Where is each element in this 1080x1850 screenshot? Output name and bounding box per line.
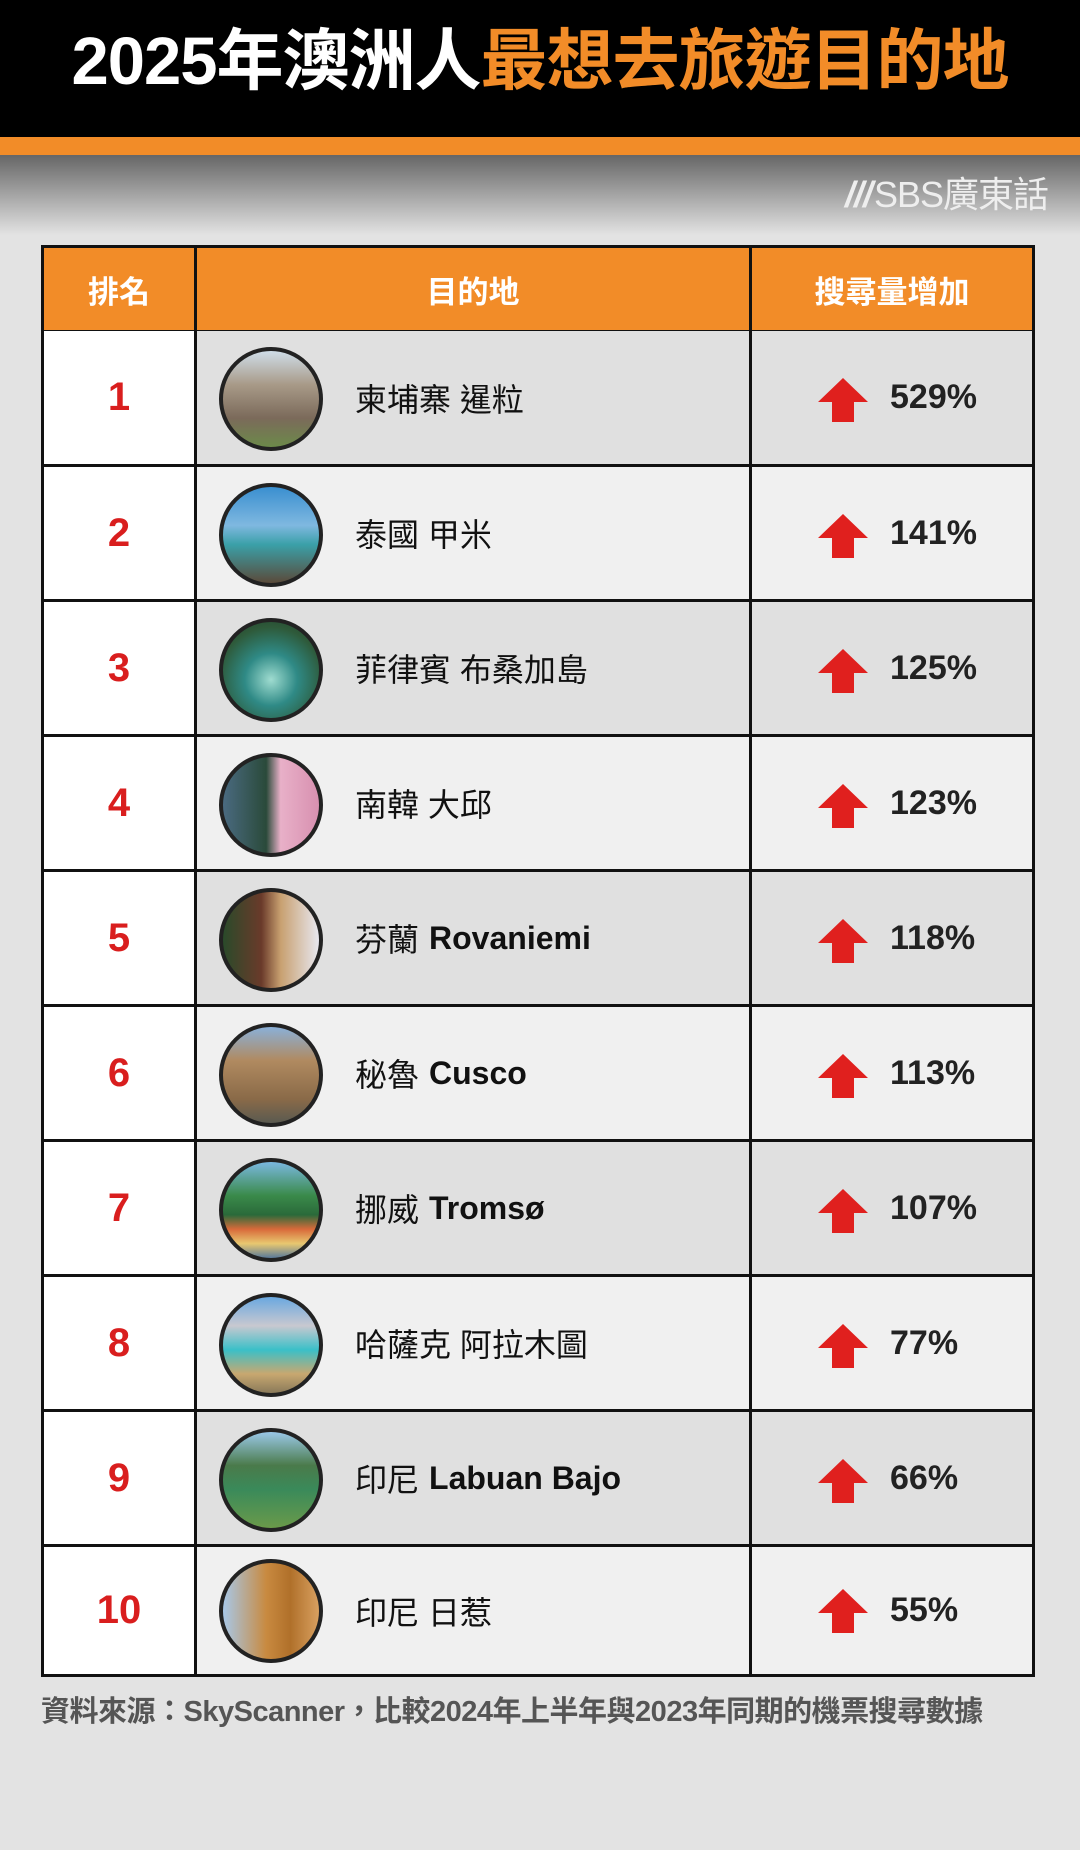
row 8: 哈薩克 阿拉木圖: [355, 1327, 588, 1363]
row 9: [44, 1412, 1032, 1544]
row 7: [44, 1142, 1032, 1274]
row 7: 107%: [890, 1188, 977, 1226]
row 3: 125%: [890, 648, 977, 686]
orange stripe: [0, 137, 1080, 155]
header bar: [0, 0, 1080, 137]
logo: SBS 廣東話: ///SBS廣東話: [845, 174, 1048, 215]
row 5: 118%: [890, 918, 975, 956]
row 4: [44, 737, 1032, 869]
row 7: Tromsø: [429, 1190, 545, 1226]
row 2: 2: [108, 510, 130, 554]
row 7: 挪威: [355, 1192, 419, 1228]
table header: [44, 248, 1032, 330]
table header: 排名: [88, 274, 150, 310]
row 1: 529%: [890, 378, 977, 416]
gray gradient band: [0, 155, 1080, 235]
row 10: 印尼 日惹: [355, 1594, 492, 1630]
title: 2025年澳洲人最想去旅遊目的地: [71, 24, 1009, 99]
table header: 搜尋量增加: [814, 274, 970, 310]
row 9: 9: [108, 1456, 130, 1500]
table header: 目的地: [426, 274, 520, 310]
row 1: 1: [108, 375, 130, 419]
table: [41, 245, 1035, 1677]
row 8: 8: [108, 1320, 130, 1364]
row 4: 4: [108, 780, 130, 824]
row 6: 6: [108, 1050, 130, 1094]
row 2: 泰國 甲米: [355, 517, 492, 553]
row 10: 55%: [890, 1591, 958, 1629]
row 3: [44, 602, 1032, 734]
row 1: [44, 331, 1032, 464]
row 5: 5: [108, 916, 130, 960]
row 5: 芬蘭: [355, 922, 419, 958]
row 2: 141%: [890, 514, 977, 552]
row 5: Rovaniemi: [429, 920, 591, 956]
row 6: [44, 1007, 1032, 1139]
footnote: 資料來源：SkyScanner，比較2024年上半年與2023年同期的機票搜尋數據: [41, 1696, 983, 1728]
row 3: 3: [108, 646, 130, 690]
row 10: [44, 1547, 1032, 1674]
row 4: 南韓 大邱: [355, 787, 492, 823]
row 8: 77%: [890, 1324, 958, 1362]
row 5: [44, 872, 1032, 1004]
row 10: 10: [97, 1588, 141, 1632]
row 3: 菲律賓 布桑加島: [355, 652, 588, 688]
row 9: 66%: [890, 1458, 958, 1496]
row 9: 印尼: [355, 1462, 419, 1498]
row 6: 秘魯: [355, 1057, 419, 1093]
row 8: [44, 1277, 1032, 1409]
row 4: 123%: [890, 784, 977, 822]
row 2: [44, 467, 1032, 599]
row 6: Cusco: [429, 1054, 527, 1090]
row 6: 113%: [890, 1054, 975, 1092]
row 7: 7: [108, 1186, 130, 1230]
row 9: Labuan Bajo: [429, 1460, 621, 1496]
row 1: 柬埔寨 暹粒: [355, 382, 524, 418]
